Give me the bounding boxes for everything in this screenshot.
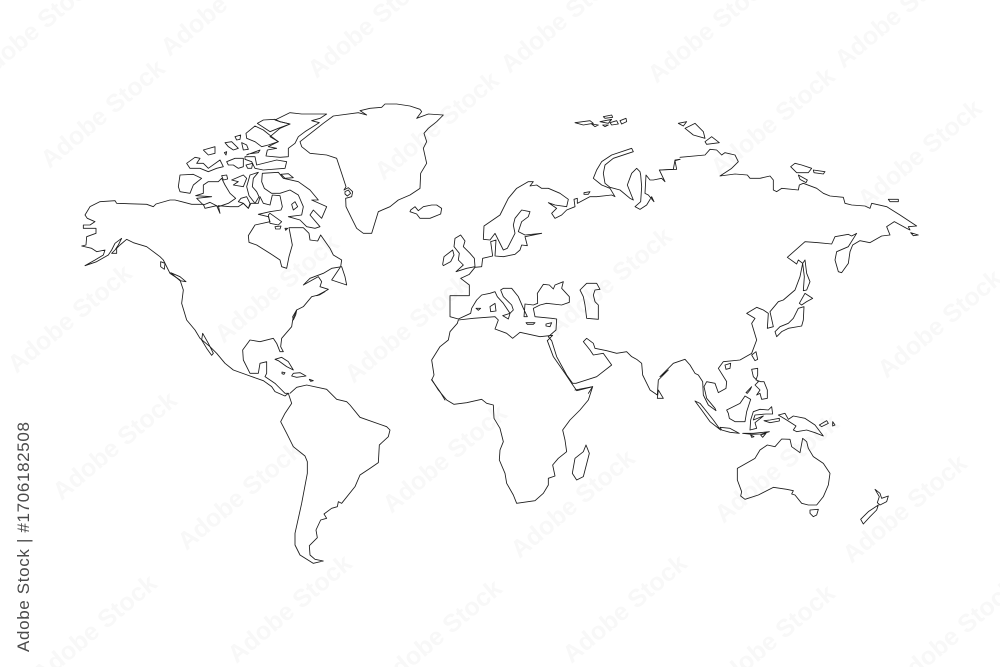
Caspian Sea xyxy=(580,283,600,319)
New Zealand xyxy=(861,489,888,524)
Australia xyxy=(737,438,830,517)
Arctic Canadian islands xyxy=(187,113,327,172)
faint stock watermarks: Adobe Stock xyxy=(47,386,182,506)
faint stock watermarks: Adobe Stock xyxy=(505,444,640,564)
faint stock watermarks: Adobe Stock xyxy=(705,62,840,182)
Madagascar xyxy=(572,445,589,480)
Europe and western Asia coast xyxy=(450,148,680,398)
faint stock watermarks: Adobe Stock xyxy=(542,222,677,342)
faint stock watermarks: Adobe Stock xyxy=(35,54,170,174)
Baffin and central Arctic islands xyxy=(178,172,327,230)
faint stock watermarks: Adobe Stock xyxy=(377,399,512,519)
faint stock watermarks: Adobe Stock xyxy=(709,409,844,529)
faint stock watermarks: Adobe Stock xyxy=(172,436,307,556)
Russian Arctic islands xyxy=(678,122,918,236)
Africa xyxy=(432,317,593,503)
Siberia, Far East and East Asia coast xyxy=(660,149,917,411)
faint stock watermarks: Adobe Stock xyxy=(837,449,972,569)
Southeast Asia islands xyxy=(695,352,835,437)
Japan and Sakhalin xyxy=(775,260,813,337)
faint stock watermarks: Adobe Stock xyxy=(209,229,344,349)
faint stock watermarks: Adobe Stock xyxy=(557,549,692,667)
Iceland xyxy=(410,205,442,218)
North America mainland outline xyxy=(82,195,347,396)
faint stock watermarks: Adobe Stock xyxy=(852,94,987,214)
faint stock watermarks: Adobe Stock xyxy=(369,66,504,186)
Svalbard and Kolguev xyxy=(575,115,627,194)
South America xyxy=(281,385,390,563)
Britain and Ireland xyxy=(443,235,475,272)
vertical stock id text: Adobe Stock | #1706182508 xyxy=(14,422,33,652)
Mediterranean islands xyxy=(476,303,552,327)
faint stock watermarks: Adobe Stock xyxy=(339,269,474,389)
faint stock watermarks: Adobe Stock xyxy=(2,259,137,379)
Greenland xyxy=(300,104,443,233)
faint stock watermarks: Adobe Stock xyxy=(222,549,357,667)
